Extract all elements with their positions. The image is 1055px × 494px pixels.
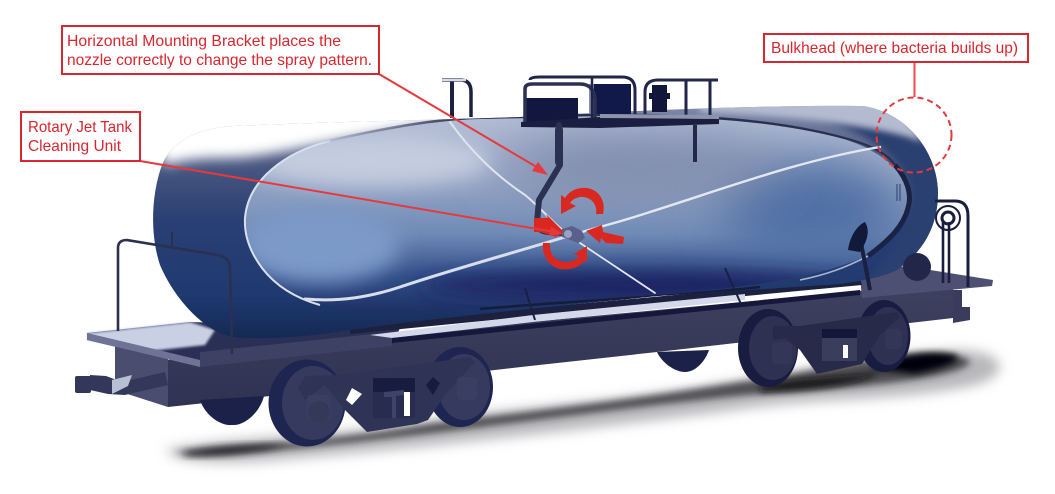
dark deck band behind strip xyxy=(350,278,862,334)
bogie: right xyxy=(738,300,910,387)
side frame xyxy=(298,357,475,432)
side frame xyxy=(773,312,900,374)
bolster xyxy=(373,378,415,418)
wheel: front xyxy=(268,360,346,446)
equipment box: centre xyxy=(593,84,631,114)
callout: mounting bracket: Horizontal Mounting Bracket places the xyxy=(67,33,341,50)
right brake wheel and rails xyxy=(903,201,968,287)
roof grab rail xyxy=(442,80,471,118)
back railing xyxy=(530,77,635,116)
dashed circle: bulkhead xyxy=(876,98,952,172)
right rim shade xyxy=(868,165,909,256)
inner cleaned surface xyxy=(246,116,907,302)
ground shadow xyxy=(165,350,1000,462)
wheel: front xyxy=(738,309,798,387)
arrow: bottom curved xyxy=(543,243,587,269)
brake wheel xyxy=(936,206,960,230)
deck plate left xyxy=(87,322,400,367)
rotary jet nozzle xyxy=(562,226,585,243)
bracket under platform xyxy=(693,125,697,162)
callout: rotary jet xyxy=(21,112,140,161)
top right pale edge xyxy=(700,100,922,142)
frame end plate xyxy=(115,340,168,407)
wheel: rear xyxy=(858,300,910,372)
arrow: right jet xyxy=(586,225,624,244)
callout: bulkhead: Bulkhead (where bacteria builds up) xyxy=(771,40,1018,57)
deck front edge xyxy=(200,332,392,367)
valve xyxy=(649,85,670,112)
equipment box: left xyxy=(526,98,578,122)
spray pattern lines xyxy=(305,122,880,300)
top platform xyxy=(521,77,719,162)
callout: rotary jet: Rotary Jet Tank xyxy=(28,119,133,136)
callout: bulkhead xyxy=(764,34,1028,62)
rear wheels xyxy=(200,350,709,425)
ball fitting xyxy=(903,253,931,281)
inner ellipse rim, top left fade xyxy=(320,118,470,143)
coupler xyxy=(75,372,168,395)
right cap tone xyxy=(832,122,938,278)
leader: mounting bracket xyxy=(379,74,548,175)
frame side beam xyxy=(168,282,953,407)
tank body xyxy=(140,95,950,345)
dark frame line xyxy=(392,290,860,343)
callout: mounting bracket: nozzle correctly to change the spray pattern. xyxy=(67,52,372,69)
rotation arrows xyxy=(534,188,624,269)
deck plate right xyxy=(860,266,993,298)
horizontal mounting bracket pipe xyxy=(537,125,565,233)
bogie: front left xyxy=(268,347,493,446)
rail car chassis xyxy=(87,266,993,407)
journal boxes xyxy=(307,395,331,420)
callout: mounting bracket xyxy=(62,26,379,74)
right railing xyxy=(645,80,718,120)
inner ellipse rim, top right xyxy=(470,115,895,165)
front railing xyxy=(525,84,595,126)
arrow: left jet xyxy=(534,214,563,237)
leader: rotary jet xyxy=(140,161,564,236)
walkway xyxy=(521,117,719,128)
small tank marks and straps xyxy=(525,184,900,320)
callout: rotary jet: Cleaning Unit xyxy=(28,138,122,155)
left handrail xyxy=(118,232,232,354)
journal boxes xyxy=(772,342,792,364)
inner ellipse outline, white left xyxy=(245,141,330,305)
upper left white highlight xyxy=(160,119,456,174)
wheel: rear xyxy=(427,347,493,427)
arrow: top curved xyxy=(561,188,604,214)
bolster xyxy=(822,329,857,361)
right frame end xyxy=(953,290,970,323)
light deck strip xyxy=(370,294,745,338)
leader: bulkhead xyxy=(914,62,916,97)
